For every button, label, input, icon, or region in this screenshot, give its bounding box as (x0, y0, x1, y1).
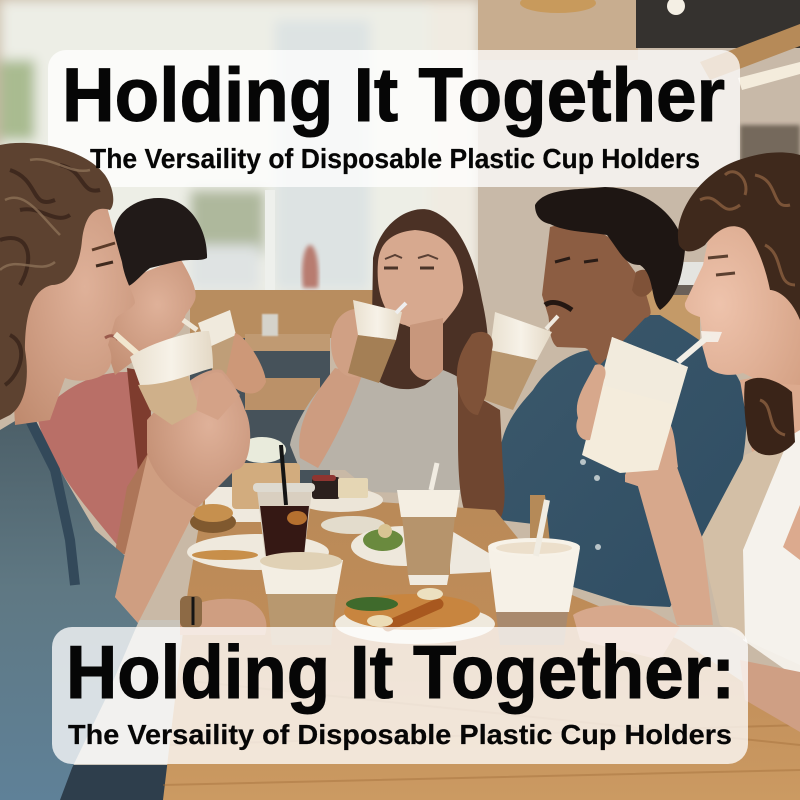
person: man second right (457, 187, 746, 607)
top title: Holding It Together (62, 53, 725, 138)
dessert plate (297, 475, 383, 512)
centre coffee cup (397, 463, 460, 585)
paper napkin (450, 530, 492, 574)
clear lid (321, 516, 385, 534)
flower vase (232, 437, 300, 509)
front left coffee cup (260, 552, 343, 645)
bottom title: Holding It Together: (66, 630, 735, 714)
middle salad plate (351, 524, 459, 566)
curls (700, 172, 795, 435)
seat area under the left figure (60, 620, 180, 800)
person: man second left (38, 198, 266, 556)
person: woman far left (0, 143, 250, 800)
bottom title panel (52, 627, 748, 764)
wooden table (163, 490, 800, 800)
person: woman far right (573, 152, 800, 732)
pastry plate (190, 504, 236, 533)
iced cola cup (253, 445, 315, 556)
top title panel (48, 50, 740, 187)
hair curls (0, 165, 100, 385)
white place mat (205, 487, 265, 522)
hand with bracelet (180, 596, 266, 635)
front food plate (335, 588, 495, 644)
person: woman centre (290, 209, 490, 495)
top subtitle: The Versaility of Disposable Plastic Cup Holders (90, 143, 700, 174)
table items: plates, food and cups (180, 437, 580, 645)
front right coffee cup (488, 500, 580, 645)
bottom subtitle: The Versaility of Disposable Plastic Cup Holders (68, 719, 732, 750)
front left plate (187, 534, 329, 570)
